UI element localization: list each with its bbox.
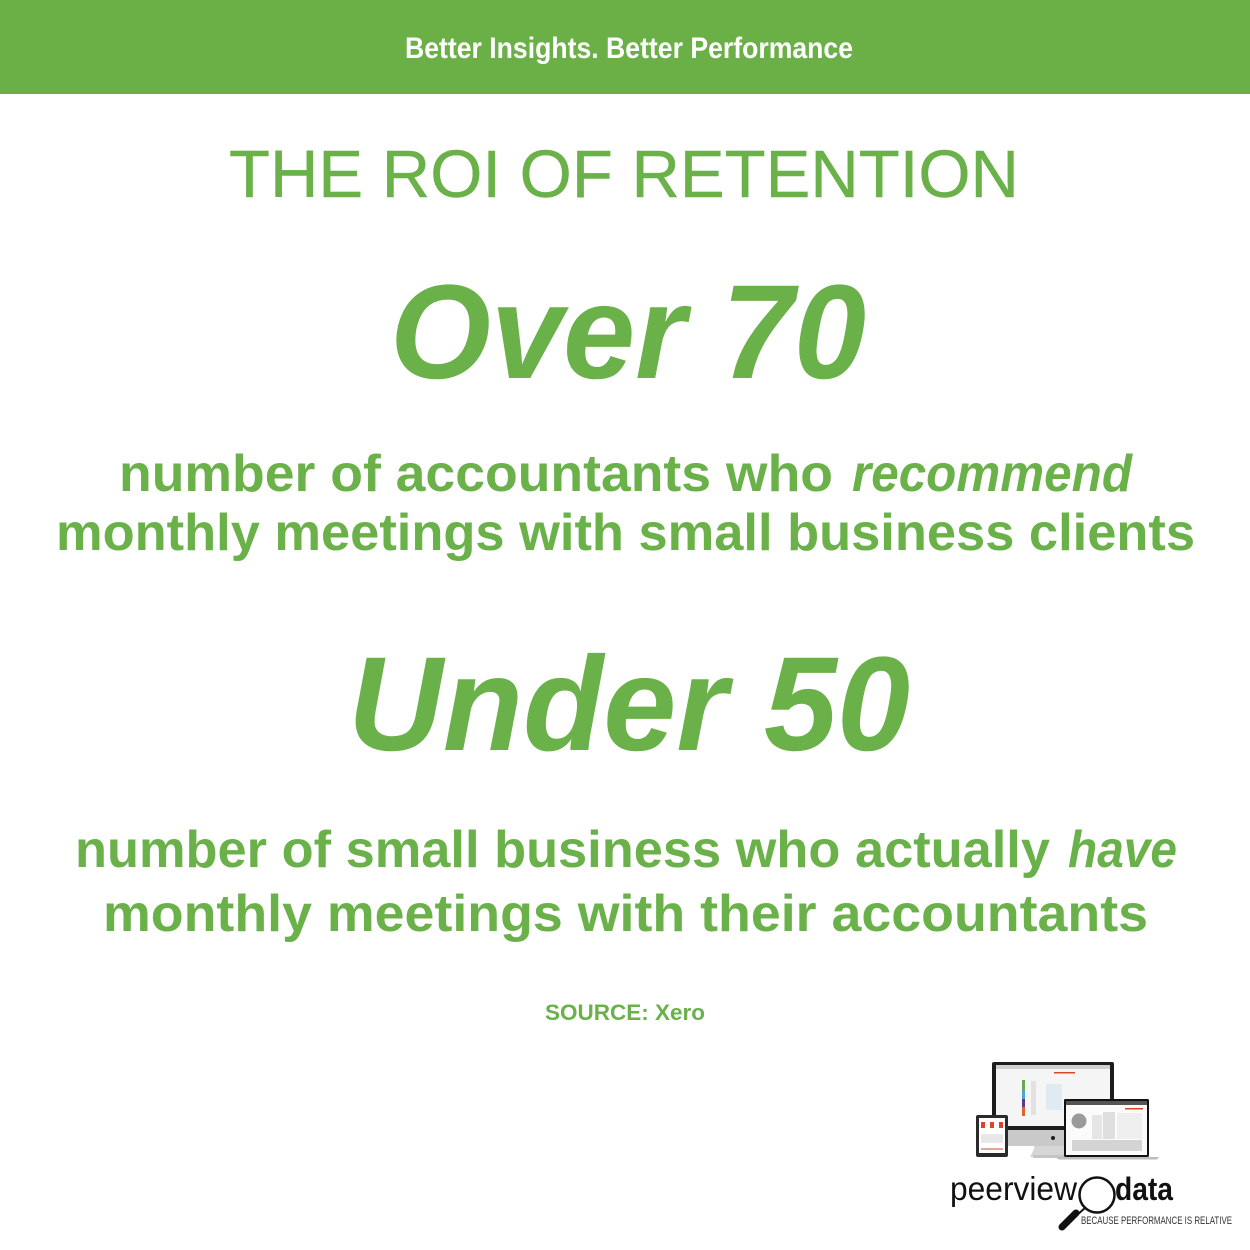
device mockups xyxy=(976,1062,1159,1160)
description: accountants recommend xyxy=(56,445,1195,562)
description: accountants recommend: number of accountants who xyxy=(119,445,833,503)
description: accountants recommend: recommend xyxy=(852,445,1133,503)
icon: tablet xyxy=(976,1115,1008,1157)
description: small businesses have: monthly meetings with their accountants xyxy=(103,885,1148,943)
icon: laptop xyxy=(1055,1099,1159,1160)
header banner xyxy=(0,0,1250,94)
source: SOURCE: Xero xyxy=(545,1000,705,1025)
description: small businesses have: number of small business who actually xyxy=(75,821,1050,879)
statistic: over 70: Over 70 xyxy=(390,258,866,407)
description: small businesses have xyxy=(75,821,1177,943)
description: accountants recommend: monthly meetings with small business clients xyxy=(56,504,1195,562)
icon: desktop monitor xyxy=(992,1062,1114,1158)
logo: peerview data: data xyxy=(1115,1171,1173,1207)
logo: peerview data xyxy=(950,1170,1232,1227)
header banner: Better Insights. Better Performance xyxy=(405,32,853,65)
description: small businesses have: have xyxy=(1068,821,1177,879)
statistic: under 50: Under 50 xyxy=(348,630,910,779)
icon: magnifying glass xyxy=(1062,1178,1114,1227)
logo: peerview data: peerview xyxy=(950,1170,1077,1207)
title: THE ROI OF RETENTION xyxy=(229,137,1019,212)
